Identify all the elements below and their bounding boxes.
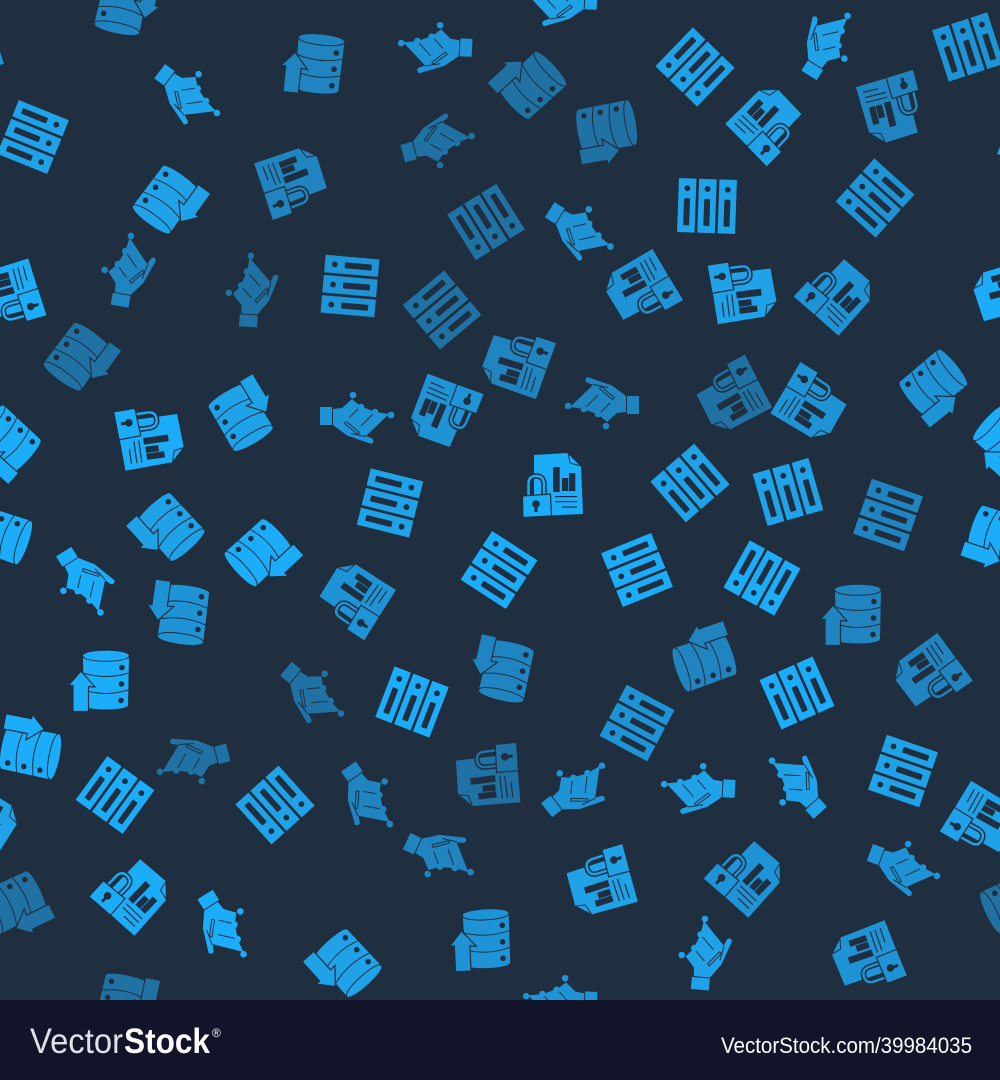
icon: server rack [601, 533, 673, 607]
icon: database with arrow [122, 488, 208, 574]
icon: database with arrow [960, 402, 1000, 488]
icon: server rack [868, 735, 938, 807]
icon: locked document [702, 832, 791, 920]
footer bar [0, 1000, 1000, 1080]
icon: hand holding network [325, 753, 411, 843]
icon: locked document [939, 779, 1000, 863]
icon: server rack [724, 540, 800, 616]
icon: database with arrow [0, 402, 46, 488]
icon: database with arrow [463, 632, 536, 705]
icon: locked document [0, 258, 47, 333]
icon: database with arrow [205, 371, 288, 454]
icon: server rack [650, 444, 730, 522]
icon: locked document [561, 843, 641, 920]
icon: database with arrow [68, 651, 129, 712]
icon: server rack [760, 657, 834, 729]
icon: hand holding network [396, 107, 481, 177]
icon: locked document [0, 779, 25, 863]
icon: hand holding network [96, 229, 160, 311]
icon: server rack [853, 479, 923, 551]
icon: database with arrow [221, 514, 307, 600]
icon: server rack [447, 184, 525, 260]
icon: server rack [836, 158, 914, 238]
logo wordmark: Vector [30, 1022, 123, 1061]
icon: server rack [357, 468, 423, 538]
icon: hand holding network [396, 20, 473, 76]
icon: database with arrow [484, 38, 570, 124]
icon: hand holding network [532, 745, 622, 832]
icon: hand holding network [149, 725, 235, 795]
icon: server rack [0, 100, 69, 174]
icon: locked document [404, 370, 485, 453]
icon: database with arrow [143, 579, 211, 647]
icon: server rack [753, 458, 823, 526]
icon: database with arrow [894, 347, 980, 432]
icon: locked document [311, 555, 399, 642]
icon: locked document [478, 323, 557, 400]
icon: database with arrow [93, 969, 165, 1041]
icon: server rack [655, 27, 735, 107]
icon: locked document [453, 742, 524, 810]
icon: locked document [251, 142, 333, 221]
icon: hand holding network [752, 739, 841, 829]
icon: server rack [321, 255, 379, 317]
icon: locked document [114, 402, 186, 471]
icon: hand holding network [143, 52, 234, 138]
icon: locked document [723, 79, 811, 168]
icon: locked document [599, 247, 684, 331]
icon: database with arrow [299, 924, 385, 1010]
icon: locked document [855, 69, 929, 146]
icon: database with arrow [130, 161, 215, 245]
image id url: VectorStock.com/39984035 [721, 1033, 972, 1058]
icon: hand holding network [785, 0, 869, 88]
icon: hand holding network [521, 0, 598, 29]
icon: hand holding network [396, 816, 486, 895]
icon: hand holding network [268, 650, 358, 738]
icon: hand holding network [181, 882, 265, 972]
icon: hand holding network [535, 189, 626, 273]
icon: database with arrow [41, 318, 126, 402]
icon: hand holding network [860, 830, 948, 904]
icon: hand holding network [43, 537, 127, 628]
icon: database with arrow [664, 616, 742, 693]
icon: server rack [235, 766, 315, 844]
icon: server rack [461, 531, 537, 609]
icon: hand holding network [521, 973, 598, 1029]
icon: server rack [0, 12, 4, 82]
icon: locked document [969, 258, 1000, 333]
icon: database with arrow [448, 908, 512, 972]
icon: server rack [932, 12, 1000, 82]
icon: locked document [689, 353, 775, 438]
icon: server rack [403, 270, 481, 350]
icon: locked document [88, 850, 177, 938]
icon: server rack [375, 666, 449, 738]
icon: locked document [522, 453, 583, 518]
logo wordmark [30, 1022, 221, 1061]
icon: server rack [600, 685, 674, 761]
icon: database with arrow [0, 868, 58, 949]
icon: locked document [827, 919, 908, 997]
icon: hand holding network [676, 914, 734, 992]
logo wordmark: ® [212, 1026, 221, 1040]
icon: database with arrow [0, 709, 67, 780]
icon: database with arrow [93, 0, 165, 41]
icon: server rack [677, 178, 737, 234]
icon: server rack [997, 100, 1000, 174]
icon: database with arrow [958, 503, 1000, 580]
logo wordmark: Stock [124, 1022, 210, 1061]
icon: hand holding network [224, 251, 280, 328]
icon: server rack [76, 756, 154, 834]
icon: database with arrow [820, 585, 881, 646]
icon: locked document [792, 250, 881, 338]
icon: database with arrow [977, 868, 1000, 949]
icon: database with arrow [0, 503, 35, 580]
icon: hand holding network [320, 392, 394, 444]
icon: hand holding network [659, 761, 736, 817]
icon: hand holding network [565, 377, 639, 429]
icon: locked document [707, 257, 778, 325]
icon: database with arrow [572, 99, 642, 169]
icon: locked document [767, 361, 854, 447]
icon: database with arrow [278, 31, 345, 97]
icon: locked document [887, 631, 974, 717]
